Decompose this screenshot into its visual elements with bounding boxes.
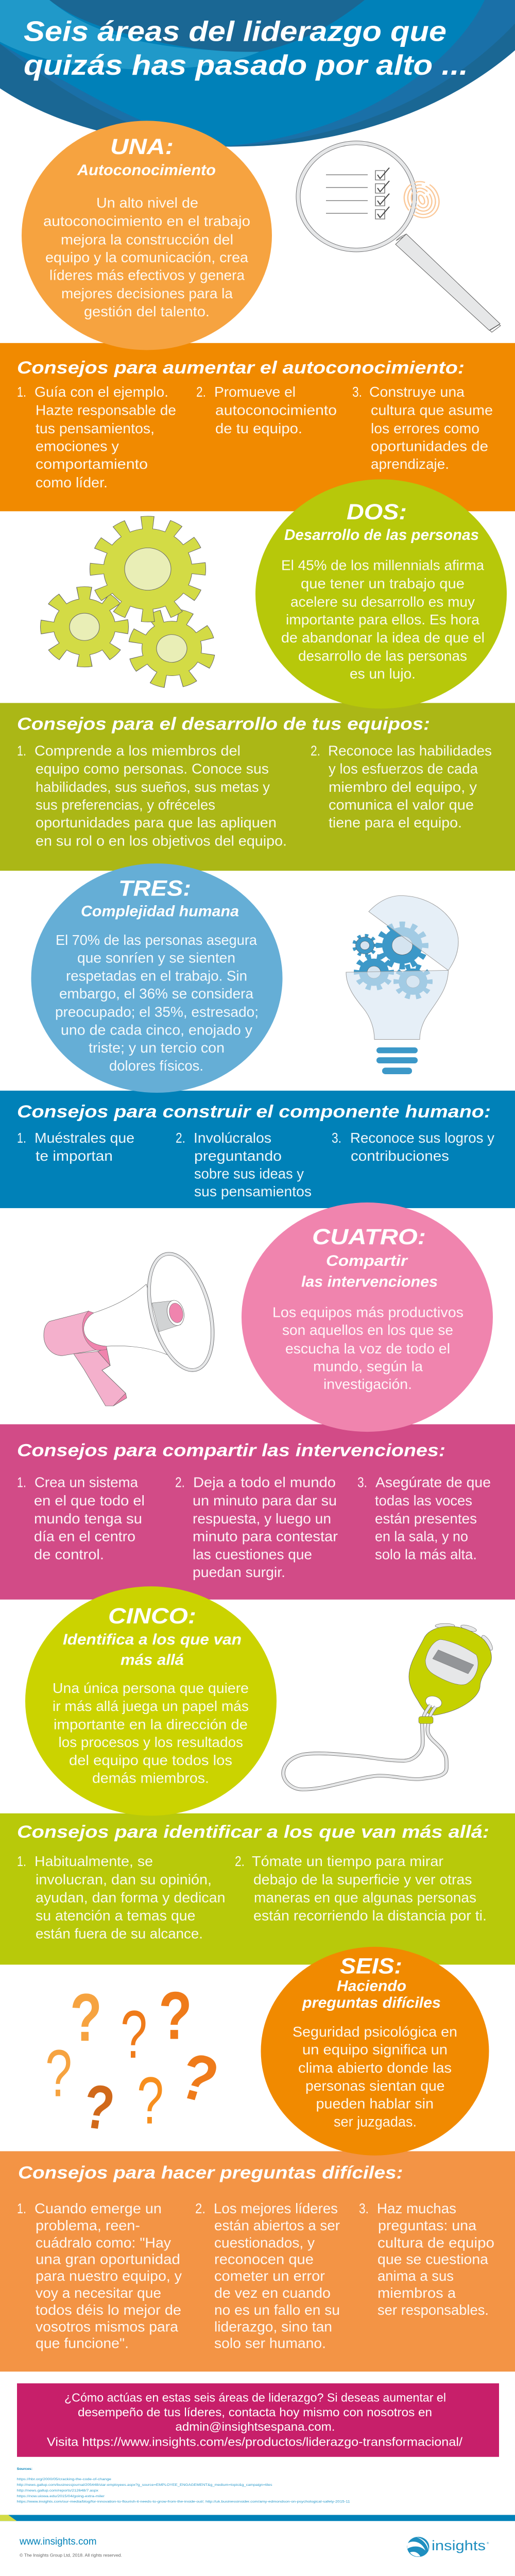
tip 6.1: voy a necesitar que <box>36 2285 161 2301</box>
text una: mejora la construcción del <box>61 232 233 248</box>
title: quizás has pasado por alto ... <box>24 49 468 81</box>
tip 6.3 <box>359 2201 494 2318</box>
logo: insights: insights <box>432 2538 486 2553</box>
icon: question marks: ? <box>159 1978 192 2054</box>
tip 3.2 <box>176 1130 312 1200</box>
tip 1.1 <box>17 384 176 490</box>
text seis: pueden hablar sin <box>316 2096 434 2112</box>
text cinco: Una única persona que quiere <box>53 1681 249 1697</box>
tip 2.2: miembro del equipo, y <box>329 779 477 795</box>
tip 1.3 <box>352 384 493 472</box>
circle dos <box>255 479 507 708</box>
tip 5.2 <box>235 1854 487 1924</box>
tip 6.2: no es un fallo en su <box>214 2302 340 2318</box>
tip 1.3: los errores como <box>371 421 479 437</box>
tip 6.3: Haz muchas <box>377 2201 456 2217</box>
text cuatro: investigación. <box>323 1377 412 1393</box>
tip 1.3: aprendizaje. <box>371 456 449 472</box>
band: tips 6 background <box>0 2151 515 2371</box>
subheading cinco <box>63 1631 242 1668</box>
panel: una <box>22 121 272 350</box>
text cuatro <box>272 1305 464 1393</box>
tip 4.3: todas las voces <box>375 1493 472 1509</box>
text dos: desarrollo de las personas <box>298 649 467 664</box>
text una <box>43 195 250 319</box>
tip 5.1 <box>17 1854 225 1942</box>
tip 2.1: habilidades, sus sueños, sus metas y <box>36 779 270 795</box>
tip 4.2 <box>175 1475 338 1581</box>
tip 6.1: para nuestro equipo, y <box>36 2268 182 2284</box>
tip 1.1: tus pensamientos, <box>36 421 154 437</box>
icon: light bulb with gears <box>346 895 458 1074</box>
heading cinco: CINCO: <box>108 1603 196 1629</box>
circle cuatro <box>242 1202 493 1432</box>
icon: question marks <box>45 1978 227 2143</box>
tip 2.2 <box>311 743 492 831</box>
text tres: triste; y un tercio con <box>89 1040 225 1056</box>
tip 1.2: 2. <box>196 384 206 400</box>
tip 4.3: en la sala, y no <box>375 1529 468 1545</box>
logo: insights <box>407 2537 489 2557</box>
tip 6.2: cuestionados, y <box>214 2235 315 2251</box>
text cinco <box>53 1681 249 1786</box>
tip 1.1: comportamiento <box>36 456 148 472</box>
tip 3.3: Reconoce sus logros y <box>350 1130 495 1146</box>
tip 4.2: minuto para contestar <box>193 1529 338 1545</box>
heading dos: DOS: <box>347 499 407 524</box>
tip 6.2: liderazgo, sino tan <box>214 2319 332 2335</box>
tip 1.1: Hazte responsable de <box>36 403 176 418</box>
tip 6.1: una gran oportunidad <box>36 2252 180 2267</box>
sources: http://news.gallup.com/reports/212648/7.aspx <box>17 2488 98 2493</box>
text una: mejores decisiones para la <box>61 286 233 302</box>
tip 4.2: un minuto para dar su <box>193 1493 337 1509</box>
tip 6.3: preguntas: una <box>378 2218 476 2234</box>
tip 5.2: debajo de la superficie y ver otras <box>253 1872 472 1888</box>
tip 4.1: en el que todo el <box>34 1493 145 1509</box>
panel: cuatro <box>242 1202 493 1432</box>
text una: gestión del talento. <box>84 304 210 319</box>
subheading seis <box>302 1978 441 2011</box>
band: tips 5 background <box>0 1814 515 1964</box>
subheading una: Autoconocimiento <box>77 162 216 179</box>
band: tips 1 background <box>0 343 515 511</box>
heading tips 1: Consejos para aumentar el autoconocimiento: <box>17 358 465 378</box>
tip 3.2: sus pensamientos <box>194 1184 312 1200</box>
logo: insights: ® <box>487 2541 489 2545</box>
text dos: es un lujo. <box>350 666 416 682</box>
tip 6.2: reconocen que <box>214 2252 314 2267</box>
text dos <box>281 558 485 682</box>
callout text: desempeño de tus líderes, contacta hoy mismo con nosotros en <box>78 2406 432 2419</box>
panel: tips van mas alla <box>17 1822 489 1942</box>
tip 5.1: ayudan, dan forma y dedican <box>36 1890 225 1906</box>
tip 1.2: Promueve el <box>214 384 296 400</box>
circle cinco <box>25 1586 277 1816</box>
tip 1.2: de tu equipo. <box>215 421 302 437</box>
tip 4.2: Deja a todo el mundo <box>193 1475 336 1490</box>
panel: tips intervenciones <box>17 1440 491 1581</box>
tip 5.1: 1. <box>17 1854 26 1870</box>
text dos: que tener un trabajo que <box>301 576 465 592</box>
text cuatro: escucha la voz de todo el <box>285 1341 450 1357</box>
tip 3.1: te importan <box>36 1148 113 1164</box>
circle una <box>22 121 272 350</box>
tip 1.1: 1. <box>17 384 26 400</box>
tip 5.2: 2. <box>235 1854 245 1870</box>
subheading seis: preguntas difíciles <box>302 1994 441 2011</box>
title: Seis áreas del liderazgo que <box>24 16 447 47</box>
panel: tres <box>31 863 282 1093</box>
heading cuatro: CUATRO: <box>312 1224 426 1249</box>
text una: líderes más efectivos y genera <box>49 268 245 283</box>
tip 4.2: las cuestiones que <box>193 1547 312 1563</box>
subheading cuatro: las intervenciones <box>301 1274 438 1290</box>
sources: https://hbr.org/2000/05/cracking-the-code-of-change <box>17 2477 111 2481</box>
heading una: UNA: <box>110 134 174 159</box>
sources: https://now.uiowa.edu/2015/04/going-extra-miler <box>17 2494 105 2498</box>
icon: magnifying glass <box>298 143 501 332</box>
sources: http://news.gallup.com/businessjournal/205448/star-employees.aspx?g_source=EMPLOYEE_ENGAGEMENT&g_medium=topic&g_campaign=tiles <box>17 2483 272 2487</box>
tip 6.3: que se cuestiona <box>377 2252 488 2267</box>
tip 4.3 <box>357 1475 491 1563</box>
text tres: El 70% de las personas asegura <box>56 933 257 948</box>
sources <box>17 2467 350 2504</box>
tip 1.3: 3. <box>352 384 362 400</box>
tip 5.1: están fuera de su alcance. <box>36 1926 203 1942</box>
callout: contact <box>17 2383 499 2457</box>
tip 4.3: 3. <box>357 1475 367 1490</box>
panel: tips equipos <box>17 714 492 849</box>
tip 5.2: maneras en que algunas personas <box>254 1890 476 1906</box>
tip 6.3: 3. <box>359 2201 369 2217</box>
footer copyright: © The Insights Group Ltd, 2018. All rights reserved. <box>20 2553 122 2558</box>
tip 3.2: sobre sus ideas y <box>194 1166 304 1182</box>
icon: question marks: ? <box>121 1997 147 2073</box>
tip 2.2: comunica el valor que <box>329 798 474 813</box>
text cinco: del equipo que todos los <box>69 1753 232 1768</box>
tip 5.1: Habitualmente, se <box>35 1854 153 1870</box>
tip 3.1: Muéstrales que <box>35 1130 134 1146</box>
text cuatro: mundo, según la <box>313 1359 423 1375</box>
tip 6.3: miembros a <box>377 2285 456 2301</box>
panel: tips autoconocimiento <box>17 358 493 490</box>
circle tres <box>31 863 282 1093</box>
tip 4.2: puedan surgir. <box>193 1565 285 1581</box>
tip 6.1: 1. <box>17 2201 26 2217</box>
tip 6.1: problema, reen- <box>36 2218 140 2234</box>
panel: cinco <box>25 1586 277 1816</box>
text cuatro: son aquellos en los que se <box>282 1323 453 1338</box>
text seis: clima abierto donde las <box>298 2060 452 2076</box>
subheading cuatro: Compartir <box>326 1252 408 1269</box>
tip 4.2: respuesta, y luego un <box>193 1511 331 1527</box>
icon: question marks: ? <box>70 1980 102 2056</box>
subheading seis: Haciendo <box>337 1978 406 1994</box>
subheading dos: Desarrollo de las personas <box>284 527 479 544</box>
panel: tips preguntas dificiles <box>17 2162 494 2351</box>
text dos: de abandonar la idea de que el <box>281 630 485 646</box>
text seis <box>293 2024 457 2130</box>
tip 5.1: su atención a temas que <box>36 1908 195 1924</box>
tip 1.2: autoconocimiento <box>215 403 337 418</box>
tip 4.1 <box>17 1475 145 1563</box>
tip 4.3: solo la más alta. <box>375 1547 477 1563</box>
tip 4.1: de control. <box>34 1547 104 1563</box>
icon: question marks: ? <box>45 2036 72 2110</box>
tip 3.2: Involúcralos <box>194 1130 271 1146</box>
tip 2.1: en su rol o en los objetivos del equipo. <box>36 834 287 849</box>
subheading cinco: más allá <box>121 1652 184 1668</box>
tip 6.1: Cuando emerge un <box>35 2201 162 2217</box>
icon: megaphone <box>44 1246 226 1406</box>
tip 3.3: 3. <box>332 1130 341 1146</box>
text una: Un alto nivel de <box>96 195 198 211</box>
tip 5.2: Tómate un tiempo para mirar <box>252 1854 443 1870</box>
tip 5.1: involucran, dan su opinión, <box>36 1872 212 1888</box>
text dos: acelere su desarrollo es muy <box>290 595 475 610</box>
text seis: Seguridad psicológica en <box>293 2024 457 2040</box>
tip 3.1: 1. <box>17 1130 26 1146</box>
text una: equipo y la comunicación, crea <box>45 250 248 266</box>
text dos: importante para ellos. Es hora <box>286 612 479 628</box>
tip 4.1: Crea un sistema <box>35 1475 138 1490</box>
icon: question marks: ? <box>79 2071 119 2143</box>
text tres: respetadas en el trabajo. Sin <box>66 969 247 984</box>
heading seis: SEIS: <box>340 1954 402 1978</box>
tip 1.3: Construye una <box>369 384 465 400</box>
tip 1.3: oportunidades de <box>371 439 488 454</box>
tip 1.1: Guía con el ejemplo. <box>35 384 168 400</box>
tip 4.1: mundo tenga su <box>34 1511 142 1527</box>
tip 4.2: 2. <box>175 1475 185 1490</box>
tip 4.1: 1. <box>17 1475 26 1490</box>
callout text: Visita https://www.insights.com/es/productos/liderazgo-transformacional/ <box>47 2435 462 2449</box>
callout text <box>47 2392 462 2449</box>
panel: tips componente humano <box>17 1101 495 1200</box>
tip 6.3: cultura de equipo <box>377 2235 494 2251</box>
footer website: www.insights.com <box>19 2536 97 2547</box>
callout text: admin@insightsespana.com. <box>175 2420 335 2434</box>
tip 6.2: solo ser humano. <box>214 2336 326 2351</box>
tip 4.3: están presentes <box>375 1511 477 1527</box>
text seis: ser juzgadas. <box>334 2114 417 2130</box>
text cuatro: Los equipos más productivos <box>272 1305 464 1320</box>
tip 6.1 <box>17 2201 182 2351</box>
text una: autoconocimiento en el trabajo <box>43 214 250 229</box>
panel: seis <box>261 1947 489 2156</box>
heading tips 4: Consejos para compartir las intervenciones: <box>17 1440 445 1460</box>
tip 6.1: cuádralo como: "Hay <box>36 2235 171 2251</box>
heading tres: TRES: <box>118 875 191 901</box>
tip 4.3: Asegúrate de que <box>375 1475 491 1490</box>
tip 2.2: y los esfuerzos de cada <box>329 761 478 777</box>
tip 2.1: equipo como personas. Conoce sus <box>36 761 269 777</box>
icon: gears <box>47 523 218 690</box>
tip 6.1: todos déis lo mejor de <box>36 2302 181 2318</box>
tip 6.3: ser responsables. <box>377 2302 489 2318</box>
footer bar <box>0 2515 515 2521</box>
tip 2.1: oportunidades para que las apliquen <box>36 815 277 831</box>
tip 1.1: como líder. <box>36 475 108 490</box>
tip 6.2: están abiertos a ser <box>214 2218 340 2234</box>
tip 3.2: preguntando <box>194 1148 282 1164</box>
band: tips 4 background <box>0 1425 515 1600</box>
text tres: que sonríen y se sienten <box>77 951 235 966</box>
text tres: embargo, el 36% se considera <box>59 986 253 1002</box>
tip 6.3: anima a sus <box>377 2268 454 2284</box>
tip 2.2: tiene para el equipo. <box>329 815 462 831</box>
text tres: preocupado; el 35%, estresado; <box>55 1005 259 1020</box>
tip 6.1: vosotros mismos para <box>36 2319 178 2335</box>
tip 2.1 <box>17 743 287 849</box>
text tres <box>55 933 259 1074</box>
tip 6.2: de vez en cuando <box>214 2285 331 2301</box>
tip 3.3: contribuciones <box>351 1148 449 1164</box>
text seis: personas sientan que <box>305 2078 444 2094</box>
heading tips 6: Consejos para hacer preguntas difíciles: <box>18 2162 403 2182</box>
subheading cuatro <box>301 1252 438 1290</box>
tip 3.2: 2. <box>176 1130 185 1146</box>
circle seis <box>261 1947 489 2156</box>
text cinco: los procesos y los resultados <box>59 1735 243 1751</box>
tip 6.2 <box>195 2201 340 2351</box>
tip 2.1: 1. <box>17 743 26 759</box>
tip 1.3: cultura que asume <box>371 403 493 418</box>
tip 3.1 <box>17 1130 134 1164</box>
band: tips 2 background <box>0 703 515 871</box>
text cinco: importante en la dirección de <box>54 1717 248 1733</box>
callout text: ¿Cómo actúas en estas seis áreas de liderazgo? Si deseas aumentar el <box>64 2392 446 2404</box>
heading tips 3: Consejos para construir el componente humano: <box>17 1101 491 1122</box>
icon: stopwatch <box>283 1623 494 1789</box>
icon: question marks: ? <box>171 2039 227 2117</box>
sources: https://www.insights.com/our-media/blog/for-innovation-to-flourish-it-needs-to-grow-from-the-inside-out/; http://uk.businessinsider.com/amy-edmondson-on-psychological-safety-2015-11 <box>17 2500 350 2504</box>
title <box>24 16 468 81</box>
tip 6.1: que funcione". <box>36 2336 129 2351</box>
tip 1.2 <box>196 384 337 437</box>
band: tips 3 background <box>0 1091 515 1208</box>
subheading cinco: Identifica a los que van <box>63 1631 242 1648</box>
tip 2.1: sus preferencias, y ofréceles <box>36 798 215 813</box>
tip 1.1: emociones y <box>36 439 119 454</box>
tip 6.2: 2. <box>195 2201 205 2217</box>
tip 3.3 <box>332 1130 495 1164</box>
heading tips 2: Consejos para el desarrollo de tus equipos: <box>17 714 430 734</box>
subheading tres: Complejidad humana <box>81 903 239 920</box>
text cinco: ir más allá juega un papel más <box>53 1699 249 1715</box>
text cinco: demás miembros. <box>92 1771 209 1786</box>
panel: dos <box>255 479 507 708</box>
text seis: un equipo significa un <box>302 2042 448 2058</box>
tip 5.2: están recorriendo la distancia por ti. <box>253 1908 487 1924</box>
tip 2.2: Reconoce las habilidades <box>328 743 492 759</box>
tip 6.2: Los mejores líderes <box>214 2201 338 2217</box>
tip 6.2: cometer un error <box>214 2268 325 2284</box>
header banner <box>0 0 515 147</box>
text tres: dolores físicos. <box>109 1058 203 1074</box>
tip 4.1: día en el centro <box>34 1529 135 1545</box>
tip 2.2: 2. <box>311 743 320 759</box>
heading tips 5: Consejos para identificar a los que van más allá: <box>17 1822 489 1842</box>
icon: question marks: ? <box>137 2063 164 2138</box>
text tres: uno de cada cinco, enojado y <box>61 1023 253 1038</box>
tip 2.1: Comprende a los miembros del <box>35 743 241 759</box>
sources: Sources: <box>17 2467 32 2471</box>
text dos: El 45% de los millennials afirma <box>281 558 484 573</box>
